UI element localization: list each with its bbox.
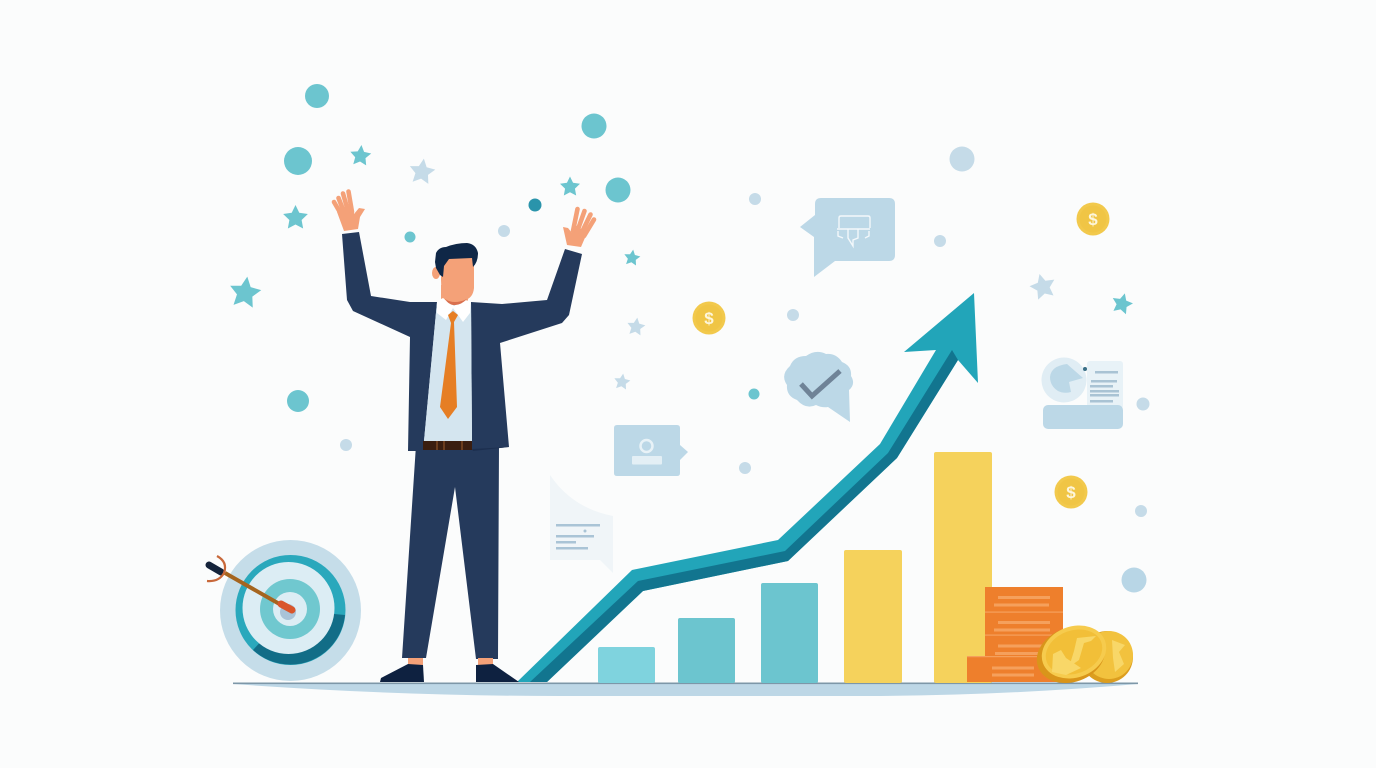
belt bbox=[423, 441, 472, 450]
floating stars bbox=[228, 144, 1135, 390]
right hand bbox=[563, 209, 594, 247]
shirt bbox=[424, 302, 472, 441]
target rings bbox=[220, 540, 361, 681]
floating circles bbox=[284, 84, 1150, 592]
icon: dollar coin, right bbox=[1054, 476, 1088, 508]
neck bbox=[441, 285, 468, 312]
gold coins bbox=[1029, 617, 1133, 692]
jacket and sleeves bbox=[342, 232, 582, 451]
icon: dollar coin, right: $ bbox=[1066, 483, 1076, 502]
report text lines bbox=[1090, 371, 1119, 402]
back coin bbox=[1081, 631, 1133, 683]
face bbox=[441, 256, 474, 304]
businessman celebrating bbox=[334, 192, 594, 682]
icon: profile card bubble bbox=[614, 425, 688, 476]
icon: cloud bubble with check mark bbox=[784, 352, 853, 422]
icon: dollar coin, centre: $ bbox=[704, 309, 714, 328]
box seams and stripes bbox=[967, 596, 1063, 676]
orange stacked boxes bbox=[967, 587, 1063, 682]
ear bbox=[432, 267, 440, 279]
dart arrow bbox=[207, 556, 292, 610]
chin shadow bbox=[445, 299, 467, 305]
target with arrow bbox=[207, 540, 361, 681]
ground line bbox=[233, 682, 1138, 696]
note text lines bbox=[556, 524, 600, 550]
tie bbox=[440, 311, 458, 419]
icon: dollar coin, top right: $ bbox=[1088, 210, 1098, 229]
rising growth arrow bbox=[517, 293, 978, 682]
icon: faded document note bbox=[550, 475, 613, 573]
icon: speech bubble with printer bbox=[800, 198, 895, 277]
trousers bbox=[402, 445, 499, 659]
hair bbox=[435, 243, 478, 277]
icon: dollar coin, top right bbox=[1076, 202, 1110, 236]
shoes bbox=[380, 664, 519, 682]
front coin bbox=[1029, 617, 1114, 692]
icon: report card with pie chart bbox=[1042, 358, 1123, 429]
jacket hem shadow bbox=[472, 447, 509, 451]
collar bbox=[437, 298, 471, 322]
icon: dollar coin, centre bbox=[692, 302, 726, 334]
ankles bbox=[408, 658, 493, 665]
left hand bbox=[334, 192, 365, 231]
bar chart bbox=[598, 452, 992, 683]
